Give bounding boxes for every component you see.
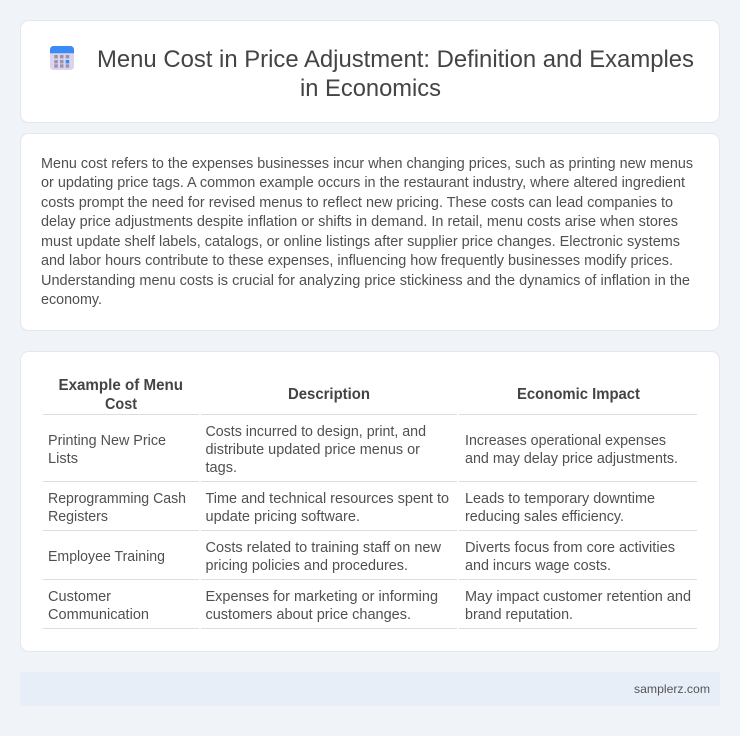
title	[97, 46, 694, 102]
cell: description	[206, 491, 449, 525]
title: Menu Cost in Price Adjustment: Definition and Examples	[97, 46, 694, 73]
footer bar	[20, 672, 720, 706]
cell: description: Costs related to training staff on new	[206, 540, 442, 556]
cell: impact: Diverts focus from core activities	[465, 540, 675, 556]
cell: description: Expenses for marketing or informing	[206, 589, 438, 605]
cell: description	[206, 424, 426, 476]
cell: impact: Leads to temporary downtime	[465, 491, 655, 507]
cell: example: Printing New Price	[48, 433, 166, 449]
table row: printing new price lists	[48, 424, 678, 476]
cell: example: Registers	[48, 509, 108, 525]
text block: menu cost explanation	[41, 156, 693, 308]
column heading: example: Cost	[105, 396, 138, 413]
cell: example: Reprogramming Cash	[48, 491, 186, 507]
table row: employee training	[48, 540, 675, 574]
cell: description: distribute updated price menus or	[206, 442, 420, 458]
table row: customer communication	[48, 589, 691, 623]
cell: impact	[465, 433, 678, 467]
cell: description: tags.	[206, 460, 237, 476]
cell: example: Customer	[48, 589, 111, 605]
text block: menu cost explanation: costs prompt the need for revised menus to reflect new pricing. These costs can lead companies to	[41, 195, 673, 211]
cell: impact	[465, 491, 655, 525]
column heading: example	[58, 377, 183, 413]
cell: description	[206, 589, 438, 623]
cell: impact: Increases operational expenses	[465, 433, 666, 449]
cell: example	[48, 589, 149, 623]
cell: description: pricing policies and procedures.	[206, 558, 408, 574]
column heading: example: Example of Menu	[58, 377, 183, 394]
text block: menu cost explanation: delay price adjustments despite inflation or shifts in demand. In retail, menu costs arise when stores	[41, 214, 678, 230]
text block: menu cost explanation: Understanding menu costs is crucial for analyzing price stickiness and the dynamics of inflation in the	[41, 273, 690, 289]
cell: impact: brand reputation.	[465, 607, 573, 623]
text block: menu cost explanation: and labor hours contribute to these expenses, influencing how frequently businesses modify prices.	[41, 253, 673, 269]
table header row	[58, 377, 641, 413]
text block: menu cost explanation: economy.	[41, 292, 102, 308]
cell: impact	[465, 540, 675, 574]
cell: example: Employee Training	[48, 549, 165, 565]
cell: impact: May impact customer retention and	[465, 589, 691, 605]
cell: example: Lists	[48, 451, 78, 467]
panel: title header	[20, 20, 720, 122]
table row: reprogramming cash registers	[48, 491, 655, 525]
panel: examples table	[20, 352, 720, 652]
title: in Economics	[300, 75, 441, 102]
cell: description: Costs incurred to design, print, and	[206, 424, 426, 440]
cell: description: Time and technical resources spent to	[206, 491, 449, 507]
text block: menu cost explanation: must update shelf labels, catalogs, or online listings after supplier price changes. Electronic systems	[41, 234, 680, 250]
cell: description: update pricing software.	[206, 509, 360, 525]
cell: example	[48, 491, 186, 525]
cell: example: Communication	[48, 607, 149, 623]
text block: menu cost explanation: Menu cost refers to the expenses businesses incur when changing prices, such as printing new menus	[41, 156, 693, 172]
cell: description	[206, 540, 442, 574]
cell: impact: and may delay price adjustments.	[465, 451, 678, 467]
column heading: economic impact: Economic Impact	[517, 386, 641, 403]
footer source text: samplerz.com	[634, 682, 710, 696]
text block: menu cost explanation: or updating price tags. A common example occurs in the restaurant industry, where altered ingredient	[41, 175, 685, 191]
cell: description: customers about price changes.	[206, 607, 411, 623]
cell: impact	[465, 589, 691, 623]
cell: example	[48, 433, 166, 467]
panel: intro description	[20, 134, 720, 330]
cell: impact: reducing sales efficiency.	[465, 509, 624, 525]
cell: impact: and incurs wage costs.	[465, 558, 611, 574]
icon: calendar	[50, 46, 74, 70]
column heading: description: Description	[288, 386, 370, 403]
